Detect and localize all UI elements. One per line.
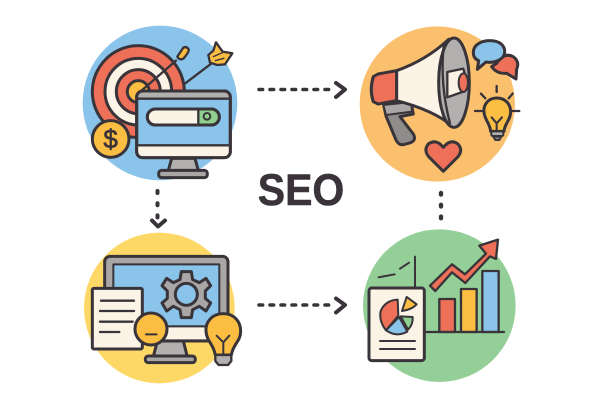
panel: monitor with gear	[84, 233, 241, 383]
icon: growth arrow	[430, 240, 498, 291]
arrow: right dotted connector	[439, 193, 443, 219]
panel: charts and report	[363, 229, 516, 382]
icon: heart	[426, 142, 461, 171]
icon: document	[92, 288, 142, 349]
icon: monitor	[105, 256, 228, 363]
background circle green	[363, 229, 516, 382]
title: SEO	[258, 165, 344, 215]
icon: light bulb	[206, 314, 241, 365]
icon: light bulb	[475, 86, 519, 140]
background circle blue	[83, 26, 237, 180]
pie chart	[380, 297, 417, 334]
background circle orange	[360, 26, 515, 182]
arrow: down dotted	[152, 191, 165, 226]
icon: dollar coin: $	[103, 124, 118, 154]
arrow: bottom dotted	[259, 298, 345, 312]
icon: report with pie chart	[369, 288, 424, 361]
panel: target and search monitor	[83, 26, 237, 180]
search bar	[147, 109, 219, 125]
icon: arrow in target	[138, 42, 232, 93]
icon: gear	[162, 272, 211, 318]
icon: speech bubbles	[473, 41, 518, 79]
icon: megaphone	[371, 38, 469, 145]
background circle yellow	[84, 233, 235, 383]
icon: target	[92, 46, 184, 138]
icon: monitor with search bar	[137, 91, 230, 178]
arrow: top dotted	[259, 83, 345, 97]
bar chart	[424, 271, 504, 332]
axis and tick marks	[379, 257, 415, 290]
icon: orange badge	[135, 313, 167, 345]
icon: dollar coin	[92, 121, 129, 157]
panel: megaphone and social	[360, 26, 519, 182]
